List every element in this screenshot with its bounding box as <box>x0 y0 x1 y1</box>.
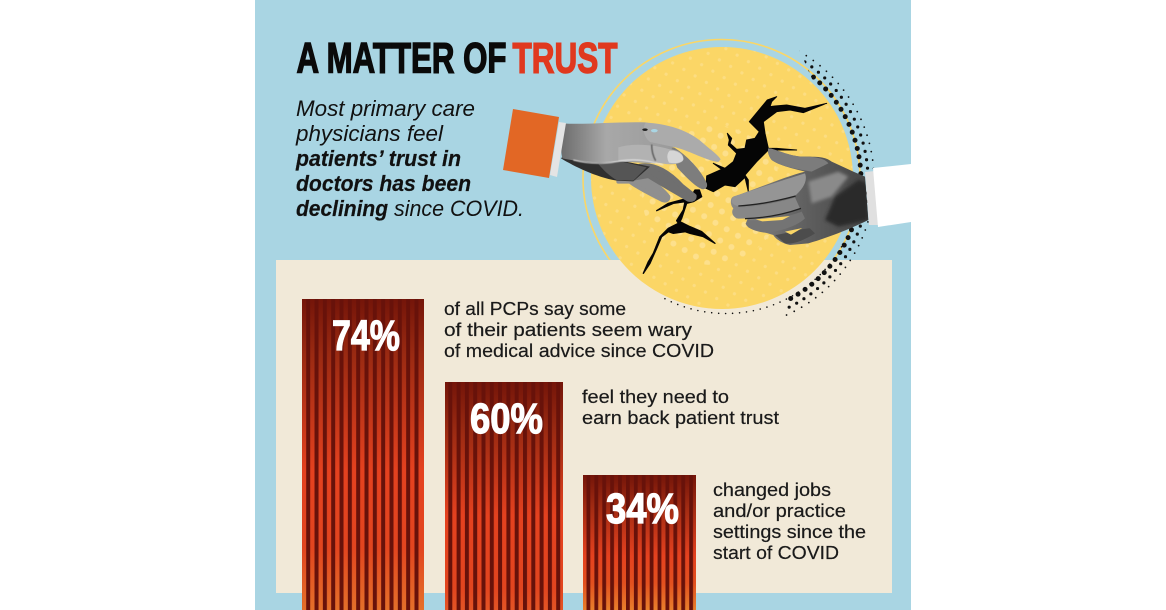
crack: upper <box>706 97 827 192</box>
palm shadow <box>561 156 650 181</box>
pinky <box>618 175 668 201</box>
intro text: Most primary care <box>296 96 475 121</box>
intro text: patients’ trust in <box>295 146 461 171</box>
index finger <box>644 123 721 162</box>
label: 74%: of medical advice since COVID <box>444 340 714 361</box>
label: 34%: and/or practice <box>713 500 846 521</box>
halftone shadow dots <box>664 50 874 316</box>
label: 34%: start of COVID <box>713 542 839 563</box>
hand creases <box>573 160 663 165</box>
left hand <box>561 122 721 201</box>
middle finger <box>673 149 705 187</box>
white sleeve <box>873 164 911 227</box>
intro text: since COVID. <box>394 196 524 221</box>
right hand <box>731 148 868 245</box>
thumb <box>618 145 683 164</box>
illustration: cracked circle and hands <box>503 32 911 328</box>
cream panel <box>276 260 892 593</box>
thumb <box>768 148 828 172</box>
right white cuff <box>865 171 879 225</box>
background panel <box>255 0 911 610</box>
ring finger <box>633 166 694 200</box>
crack: lower <box>643 190 715 273</box>
title: TRUST <box>512 34 618 82</box>
bar: 34%: 34% <box>606 485 679 533</box>
label: 74%: of all PCPs say some <box>444 298 626 319</box>
label: 60%: feel they need to <box>582 386 729 407</box>
palm mid tone <box>598 162 647 181</box>
left white cuff <box>550 122 566 177</box>
yellow circle <box>591 47 853 309</box>
back of hand <box>561 122 675 163</box>
thumb nail <box>667 151 683 163</box>
bar: 74% <box>302 299 424 610</box>
label: 34%: changed jobs <box>713 479 831 500</box>
label: 60% <box>582 386 780 428</box>
title: A MATTER OF <box>296 34 506 82</box>
index finger <box>732 173 806 206</box>
intro text: doctors has been <box>296 171 471 196</box>
dorsal shading <box>808 172 868 227</box>
label: 74%: of their patients seem wary <box>444 319 693 340</box>
intro text: declining <box>296 196 389 221</box>
label: 34% <box>713 479 866 563</box>
bar: 60%: 60% <box>470 395 543 443</box>
hand silhouette <box>731 148 868 245</box>
intro text: physicians feel <box>295 121 444 146</box>
bar: 34% <box>583 475 696 610</box>
label: 60%: earn back patient trust <box>582 407 780 428</box>
bar: 60% <box>445 382 563 610</box>
finger gaps <box>738 196 801 219</box>
pinky <box>775 228 815 244</box>
label: 34%: settings since the <box>713 521 866 542</box>
label: 74% <box>444 298 714 361</box>
intro text <box>295 96 524 221</box>
ring outline behind circle <box>583 40 860 316</box>
knuckle mark <box>642 128 648 131</box>
ring finger <box>746 212 805 233</box>
middle finger <box>733 197 800 219</box>
bar: 74%: 74% <box>332 312 400 360</box>
orange sleeve <box>503 109 559 178</box>
